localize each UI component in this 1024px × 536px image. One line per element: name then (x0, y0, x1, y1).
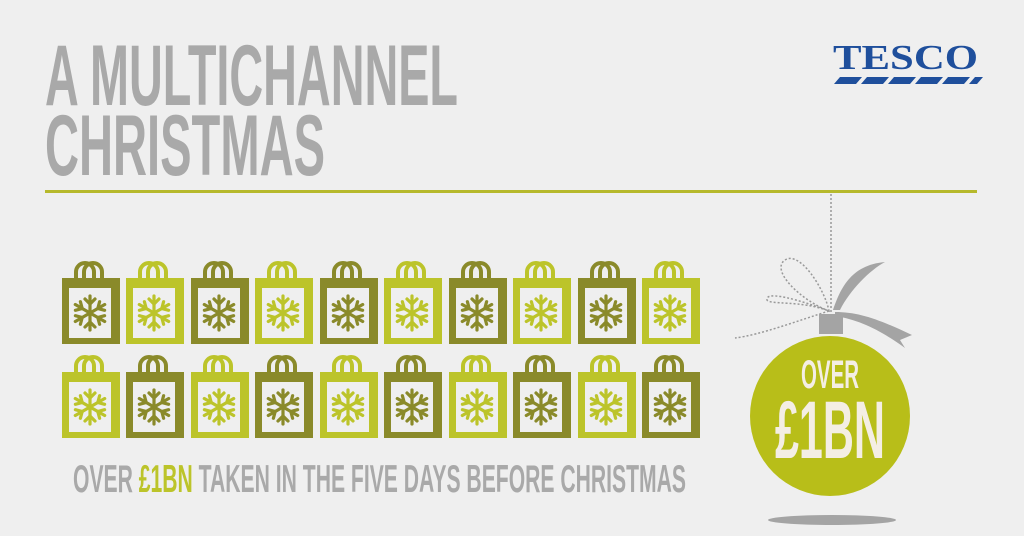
dotted string (830, 194, 832, 315)
logo: Tesco: TESCO (833, 38, 978, 77)
row 2 bags (62, 357, 700, 438)
bauble ornament (735, 194, 912, 525)
title (45, 28, 458, 194)
row 1 bags (62, 263, 700, 344)
divider line (45, 190, 977, 193)
bag grid (62, 263, 700, 438)
bow: dotted loops and grey ribbon (735, 258, 912, 348)
shadow (768, 515, 896, 525)
title: CHRISTMAS (45, 98, 325, 194)
cap (819, 314, 843, 334)
ball (750, 336, 910, 496)
ball text: OVER (801, 353, 859, 397)
bauble ornament: £1BN (775, 385, 885, 476)
logo: Tesco (833, 38, 983, 84)
title: A MULTICHANNEL (45, 28, 458, 124)
